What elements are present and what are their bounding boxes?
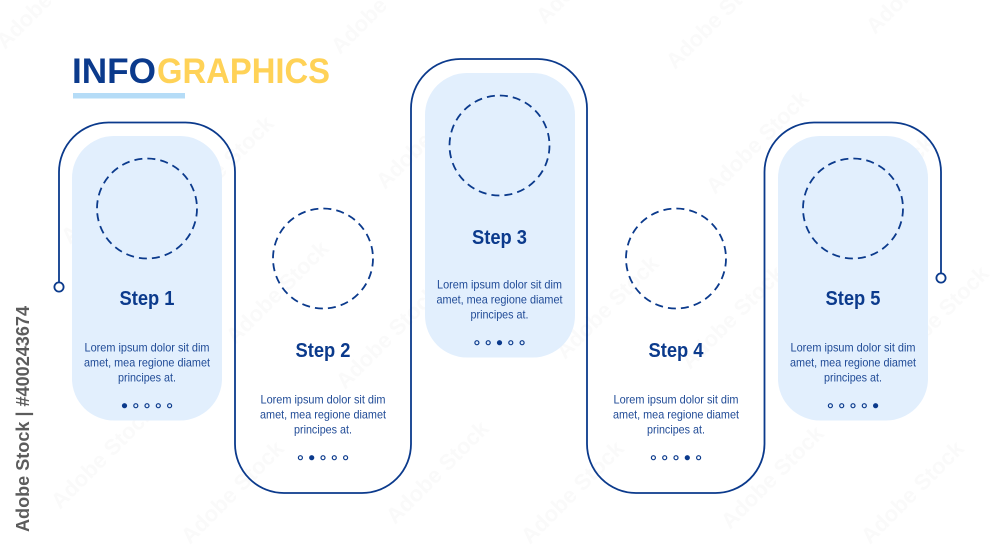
text block: step 3: amet, mea regione diamet — [436, 292, 563, 306]
watermark pattern: Adobe Stock — [166, 110, 279, 224]
panel: step 5 background — [778, 136, 928, 420]
pagination dots: step 2 — [298, 455, 348, 460]
text block: step 4 — [613, 392, 740, 436]
text block: step 1: Lorem ipsum dolor sit dim — [84, 340, 210, 354]
pagination dots: step 1 — [122, 403, 172, 408]
text block: step 1: amet, mea regione diamet — [84, 356, 211, 370]
text block: step 2: Lorem ipsum dolor sit dim — [260, 392, 386, 406]
watermark pattern: Adobe Stock — [56, 135, 169, 249]
pagination dots: step 3 — [475, 340, 524, 345]
text block: step 3: Lorem ipsum dolor sit dim — [437, 278, 562, 292]
step 5 — [790, 158, 917, 408]
heading: step 1: Step 1 — [120, 288, 174, 310]
title — [72, 52, 330, 91]
text block: step 2 — [260, 392, 387, 436]
text block: step 4: amet, mea regione diamet — [613, 408, 740, 422]
icon placeholder: step 1 — [97, 158, 197, 258]
side stock credit: Adobe Stock | #400243674 — [12, 305, 33, 532]
watermark pattern: Adobe Stock — [826, 130, 939, 244]
watermark pattern: Adobe Stock — [176, 435, 289, 547]
title: GRAPHICS — [157, 52, 330, 91]
text block: step 5 — [790, 340, 917, 384]
watermark pattern: Adobe Stock — [676, 260, 789, 374]
watermark pattern: Adobe Stock — [371, 80, 484, 194]
heading: step 4: Step 4 — [648, 340, 704, 362]
text block: step 5: principes at. — [824, 370, 882, 384]
title underline — [73, 93, 185, 98]
text block: step 4: principes at. — [647, 422, 705, 436]
text block: step 1 — [84, 340, 211, 384]
pagination dots: step 4 — [651, 455, 701, 460]
line end node — [936, 273, 946, 283]
text block: step 3 — [436, 278, 563, 322]
line start node — [54, 282, 64, 292]
step 2 — [260, 208, 387, 460]
watermark pattern: Adobe Stock — [46, 400, 159, 514]
pagination dots: step 5 — [828, 403, 878, 408]
watermark pattern: Adobe Stock — [881, 260, 994, 374]
watermark pattern: Adobe Stock — [381, 415, 494, 529]
watermark pattern: Adobe Stock — [221, 235, 334, 349]
panel: step 1 background — [72, 136, 222, 420]
watermark pattern: Adobe Stock — [551, 250, 664, 364]
text block: step 5: amet, mea regione diamet — [790, 356, 917, 370]
step 3 — [436, 96, 563, 345]
icon placeholder: step 4 — [626, 208, 726, 308]
text block: step 5: Lorem ipsum dolor sit dim — [790, 340, 916, 354]
icon placeholder: step 2 — [273, 208, 373, 308]
icon placeholder: step 3 — [450, 96, 550, 196]
text block: step 4: Lorem ipsum dolor sit dim — [614, 392, 738, 406]
heading: step 5: Step 5 — [826, 288, 880, 310]
text block: step 3: principes at. — [470, 308, 528, 322]
heading: step 3: Step 3 — [472, 227, 527, 249]
watermark pattern: Adobe Stock — [716, 420, 829, 534]
text block: step 1: principes at. — [118, 370, 176, 384]
heading: step 2: Step 2 — [296, 340, 350, 362]
panel: step 3 background — [425, 73, 575, 358]
text block: step 2: principes at. — [294, 422, 352, 436]
watermark pattern: Adobe Stock — [701, 85, 814, 199]
watermark pattern: Adobe Stock — [331, 280, 444, 394]
watermark pattern: Adobe Stock — [856, 435, 969, 547]
connecting outline — [59, 59, 941, 493]
icon placeholder: step 5 — [803, 158, 903, 258]
text block: step 2: amet, mea regione diamet — [260, 408, 387, 422]
step 4 — [613, 208, 740, 460]
step 1 — [84, 158, 211, 408]
watermark pattern: Adobe Stock — [516, 435, 629, 547]
title: INFO — [72, 52, 156, 91]
